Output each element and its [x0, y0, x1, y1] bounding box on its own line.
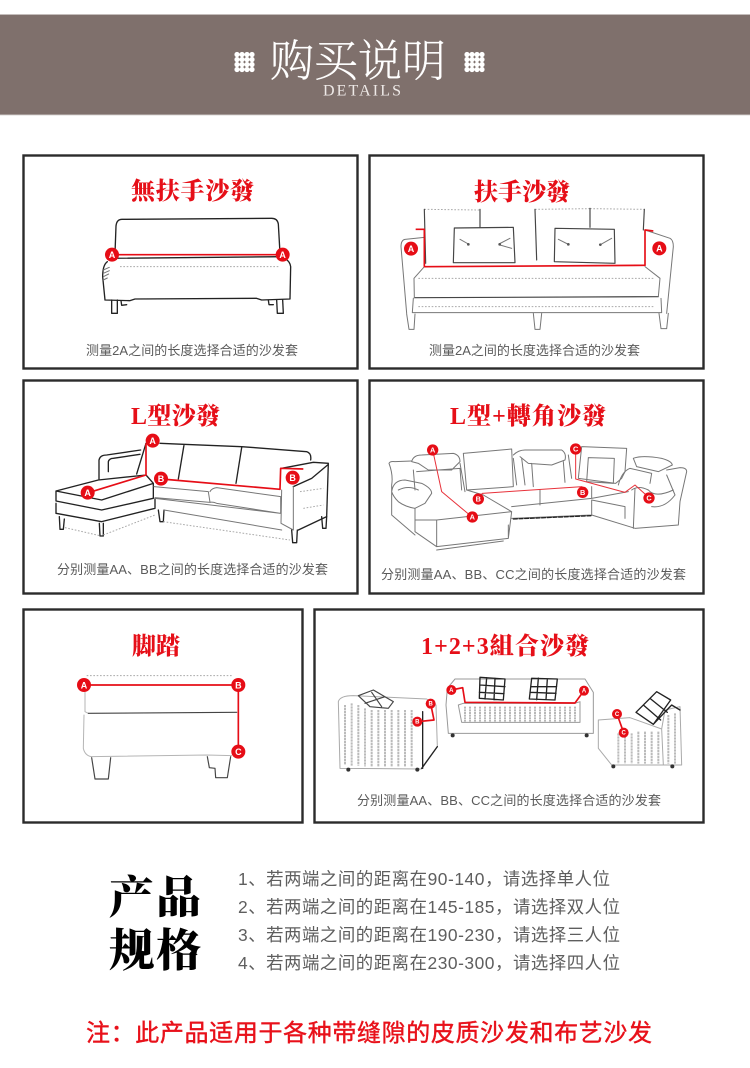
heading: product specs: [109, 861, 201, 979]
caption: 测量2A之间的长度选择合适的沙发套: [429, 343, 640, 358]
illustration: sofa with arms: [401, 208, 673, 329]
panel: armless sofa: [24, 156, 358, 368]
measure line A: [88, 443, 146, 493]
caption: 分别测量AA、BB之间的长度选择合适的沙发套: [57, 562, 328, 577]
illustration: armless sofa: [103, 218, 291, 313]
marker B lower: [412, 717, 422, 727]
header band: [0, 14, 750, 115]
marker A right: [579, 686, 589, 696]
caption: 测量2A之间的长度选择合适的沙发套: [86, 343, 298, 358]
marker A lower: [81, 486, 95, 500]
marker A right: [276, 248, 290, 262]
marker B right: B: [289, 473, 296, 483]
marker C lower: C: [646, 494, 652, 503]
panel: footstool: [24, 610, 302, 822]
panel: L-shaped corner sofa: [370, 380, 704, 594]
marker C upper: C: [573, 445, 579, 454]
marker A right: A: [582, 689, 587, 695]
measure line C: [576, 449, 649, 498]
marker A lower: A: [470, 513, 476, 522]
caption: 分别测量AA、BB、CC之间的长度选择合适的沙发套: [357, 793, 661, 808]
marker A lower: [467, 511, 478, 523]
single armchair left: [338, 690, 437, 772]
measure line: [84, 685, 238, 752]
marker A right: A: [656, 244, 663, 254]
measure line B: [162, 468, 303, 489]
marker A lower: A: [84, 488, 91, 498]
marker C: C: [235, 747, 242, 757]
spec list: 4、若两端之间的距离在230-300，请选择四人位: [238, 953, 620, 973]
panel: sofa with arms: [370, 156, 704, 368]
icon: left dot grid: [234, 52, 255, 72]
spec list: 1、若两端之间的距离在90-140，请选择单人位: [238, 869, 610, 889]
marker A left: [404, 242, 418, 256]
marker B right: [577, 487, 588, 498]
marker C upper: [612, 709, 622, 719]
spec list: [238, 869, 620, 973]
marker A upper: [146, 434, 160, 448]
measure line B: [417, 704, 434, 722]
marker C lower: C: [621, 731, 626, 737]
spec list: 2、若两端之间的距离在145-185，请选择双人位: [238, 897, 620, 917]
marker B left: B: [158, 474, 165, 484]
measure line: [113, 252, 283, 257]
panel title: 扶手沙發: [474, 178, 570, 206]
marker B right: [286, 471, 300, 485]
marker B lower: B: [415, 720, 420, 726]
caption: 分别测量AA、BB、CC之间的长度选择合适的沙发套: [381, 567, 686, 582]
spec list: 3、若两端之间的距离在190-230，请选择三人位: [238, 925, 620, 945]
panel title: 1+2+3組合沙發: [421, 632, 589, 660]
marker C lower: [643, 492, 655, 504]
panel title: 無扶手沙發: [131, 177, 254, 205]
single armchair right: [598, 692, 682, 768]
marker A left: A: [408, 244, 415, 254]
three-seat sofa: [446, 677, 593, 737]
marker B: [231, 678, 245, 692]
panel title: L型沙發: [131, 402, 220, 430]
measure line A: [451, 688, 584, 703]
heading: product specs: 规格: [109, 914, 201, 979]
marker A: [77, 678, 91, 692]
marker B left: B: [476, 495, 481, 504]
icon: right dot grid: [464, 52, 485, 72]
marker B upper: B: [429, 702, 434, 708]
marker A upper: A: [149, 436, 156, 446]
measure line: [416, 229, 653, 267]
illustration: footstool: [77, 676, 245, 779]
marker A upper: [427, 444, 438, 456]
marker C: [231, 745, 245, 759]
marker B upper: [426, 699, 436, 709]
measure line A: [433, 450, 472, 517]
marker B left: [473, 493, 484, 505]
panel title: L型+轉角沙發: [450, 402, 606, 430]
marker C upper: [570, 443, 581, 455]
heading: product specs: 产品: [109, 861, 201, 926]
marker C upper: C: [615, 712, 620, 718]
panel: 1+2+3 sofa set: [314, 610, 704, 822]
note: 注：此产品适用于各种带缝隙的皮质沙发和布艺沙发: [86, 1013, 652, 1048]
subheading: details: DETAILS: [323, 82, 401, 100]
marker B left: [154, 472, 168, 486]
panel title: 脚踏: [132, 633, 180, 660]
illustration: sofa set: [338, 677, 682, 772]
marker A right: A: [279, 250, 286, 260]
marker A right: [652, 241, 666, 255]
measure line B: [478, 487, 582, 499]
illustration: corner sofa: [389, 443, 687, 550]
marker A left: A: [449, 688, 454, 694]
marker A left: A: [109, 250, 116, 260]
marker A: A: [81, 680, 88, 690]
marker A left: [105, 248, 119, 262]
panel: L-shaped sofa: [24, 380, 358, 594]
marker C lower: [619, 728, 629, 738]
illustration: L-shaped sofa: [56, 434, 328, 543]
measure line C: [617, 714, 624, 733]
marker B right: B: [580, 488, 585, 497]
marker A upper: A: [430, 446, 436, 455]
marker B: B: [235, 680, 242, 690]
heading: 购买说明: 购买说明: [270, 25, 446, 89]
marker A left: [446, 685, 456, 695]
